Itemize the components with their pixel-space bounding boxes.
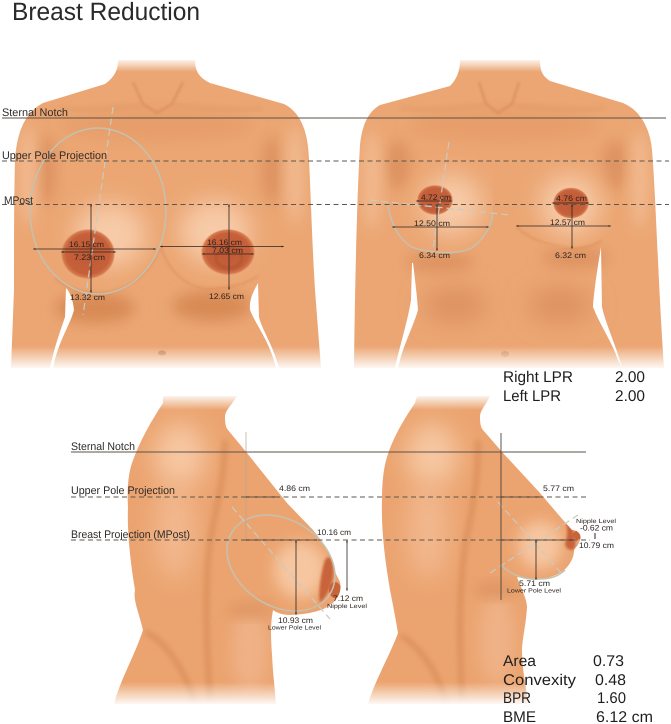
measurements right: 7.03 cm	[212, 246, 243, 255]
side line labels	[71, 441, 190, 541]
measurements: 5.77 cm	[543, 484, 574, 493]
fades	[100, 394, 290, 706]
side line labels: Upper Pole Projection	[71, 485, 175, 497]
measurements: Nipple Level	[327, 603, 367, 610]
measurements left	[393, 193, 488, 260]
shape metrics: BPR	[503, 690, 531, 707]
measurements left: 13.32 cm	[70, 293, 105, 302]
body silhouette	[368, 396, 583, 704]
lower pole outline and meridians	[490, 502, 578, 579]
lower pole outline and meridians	[370, 142, 510, 253]
measurements right: 12.65 cm	[209, 292, 244, 301]
navel	[501, 351, 509, 357]
LPR values: 2.00	[615, 388, 645, 405]
measurements right: 16.16 cm	[207, 238, 242, 247]
LPR values: 2.00	[615, 369, 645, 386]
measurements left: 16.15 cm	[69, 240, 104, 249]
measurements: -0.62 cm	[580, 524, 613, 532]
front line labels: Upper Pole Projection	[2, 150, 107, 162]
measurements: Lower Pole Level	[507, 588, 561, 594]
measurements right: 6.32 cm	[555, 251, 586, 260]
body silhouette	[114, 396, 341, 704]
breast outline and meridian	[209, 432, 353, 631]
measurements: Nipple Level	[576, 518, 616, 525]
breast outline and meridian	[30, 107, 166, 315]
LPR values	[503, 369, 645, 405]
measurements left: 6.34 cm	[419, 251, 450, 260]
measurements: 5.71 cm	[519, 579, 550, 588]
figure: side view before surgery	[100, 394, 367, 706]
LPR values: Left LPR	[503, 388, 561, 405]
measurements	[242, 484, 367, 632]
measurements: 10.16 cm	[317, 528, 351, 537]
front line labels: MPost	[4, 195, 33, 207]
fades	[360, 394, 535, 706]
torso silhouette	[354, 60, 664, 368]
LPR values: Right LPR	[503, 369, 573, 386]
shape metrics	[503, 653, 653, 724]
measurements right	[517, 194, 610, 260]
areolas	[61, 229, 255, 279]
front reference lines	[2, 118, 669, 204]
arm gaps	[50, 283, 279, 368]
measurements: Lower Pole Level	[268, 624, 321, 632]
measurements	[501, 433, 616, 600]
shape metrics: 0.73	[593, 653, 624, 670]
areolas	[417, 185, 589, 218]
measurements left: 7.23 cm	[74, 253, 105, 262]
figure: side view after surgery	[360, 394, 616, 706]
fades	[0, 58, 340, 370]
fades	[340, 58, 671, 370]
measurements right	[161, 205, 283, 301]
measurements: 4.86 cm	[279, 484, 310, 493]
measurements right: 12.57 cm	[550, 218, 585, 227]
front line labels	[2, 107, 107, 207]
figure: front view before surgery	[0, 58, 340, 370]
torso silhouette	[11, 60, 321, 368]
shape metrics: Convexity	[503, 672, 576, 689]
shape metrics: Area	[503, 653, 536, 670]
front line labels: Sternal Notch	[2, 107, 68, 119]
measurements: 10.93 cm	[278, 616, 313, 625]
figure: front view after surgery	[340, 58, 671, 370]
measurements right: 4.76 cm	[556, 194, 587, 203]
measurements: 10.79 cm	[579, 541, 614, 550]
breasts	[56, 190, 260, 292]
side line labels: Sternal Notch	[71, 441, 135, 453]
measurements left	[34, 205, 155, 302]
side reference lines	[71, 452, 590, 540]
breasts	[412, 165, 611, 252]
arm gaps	[395, 247, 622, 368]
side line labels: Breast Projection (MPost)	[71, 529, 190, 541]
measurements left: 12.50 cm	[414, 219, 450, 228]
shape metrics: 1.60	[597, 690, 626, 707]
navel	[158, 350, 166, 356]
measurements: 7.12 cm	[333, 594, 363, 603]
shape metrics: 0.48	[595, 672, 626, 689]
measurements left: 4.72 cm	[421, 193, 451, 202]
